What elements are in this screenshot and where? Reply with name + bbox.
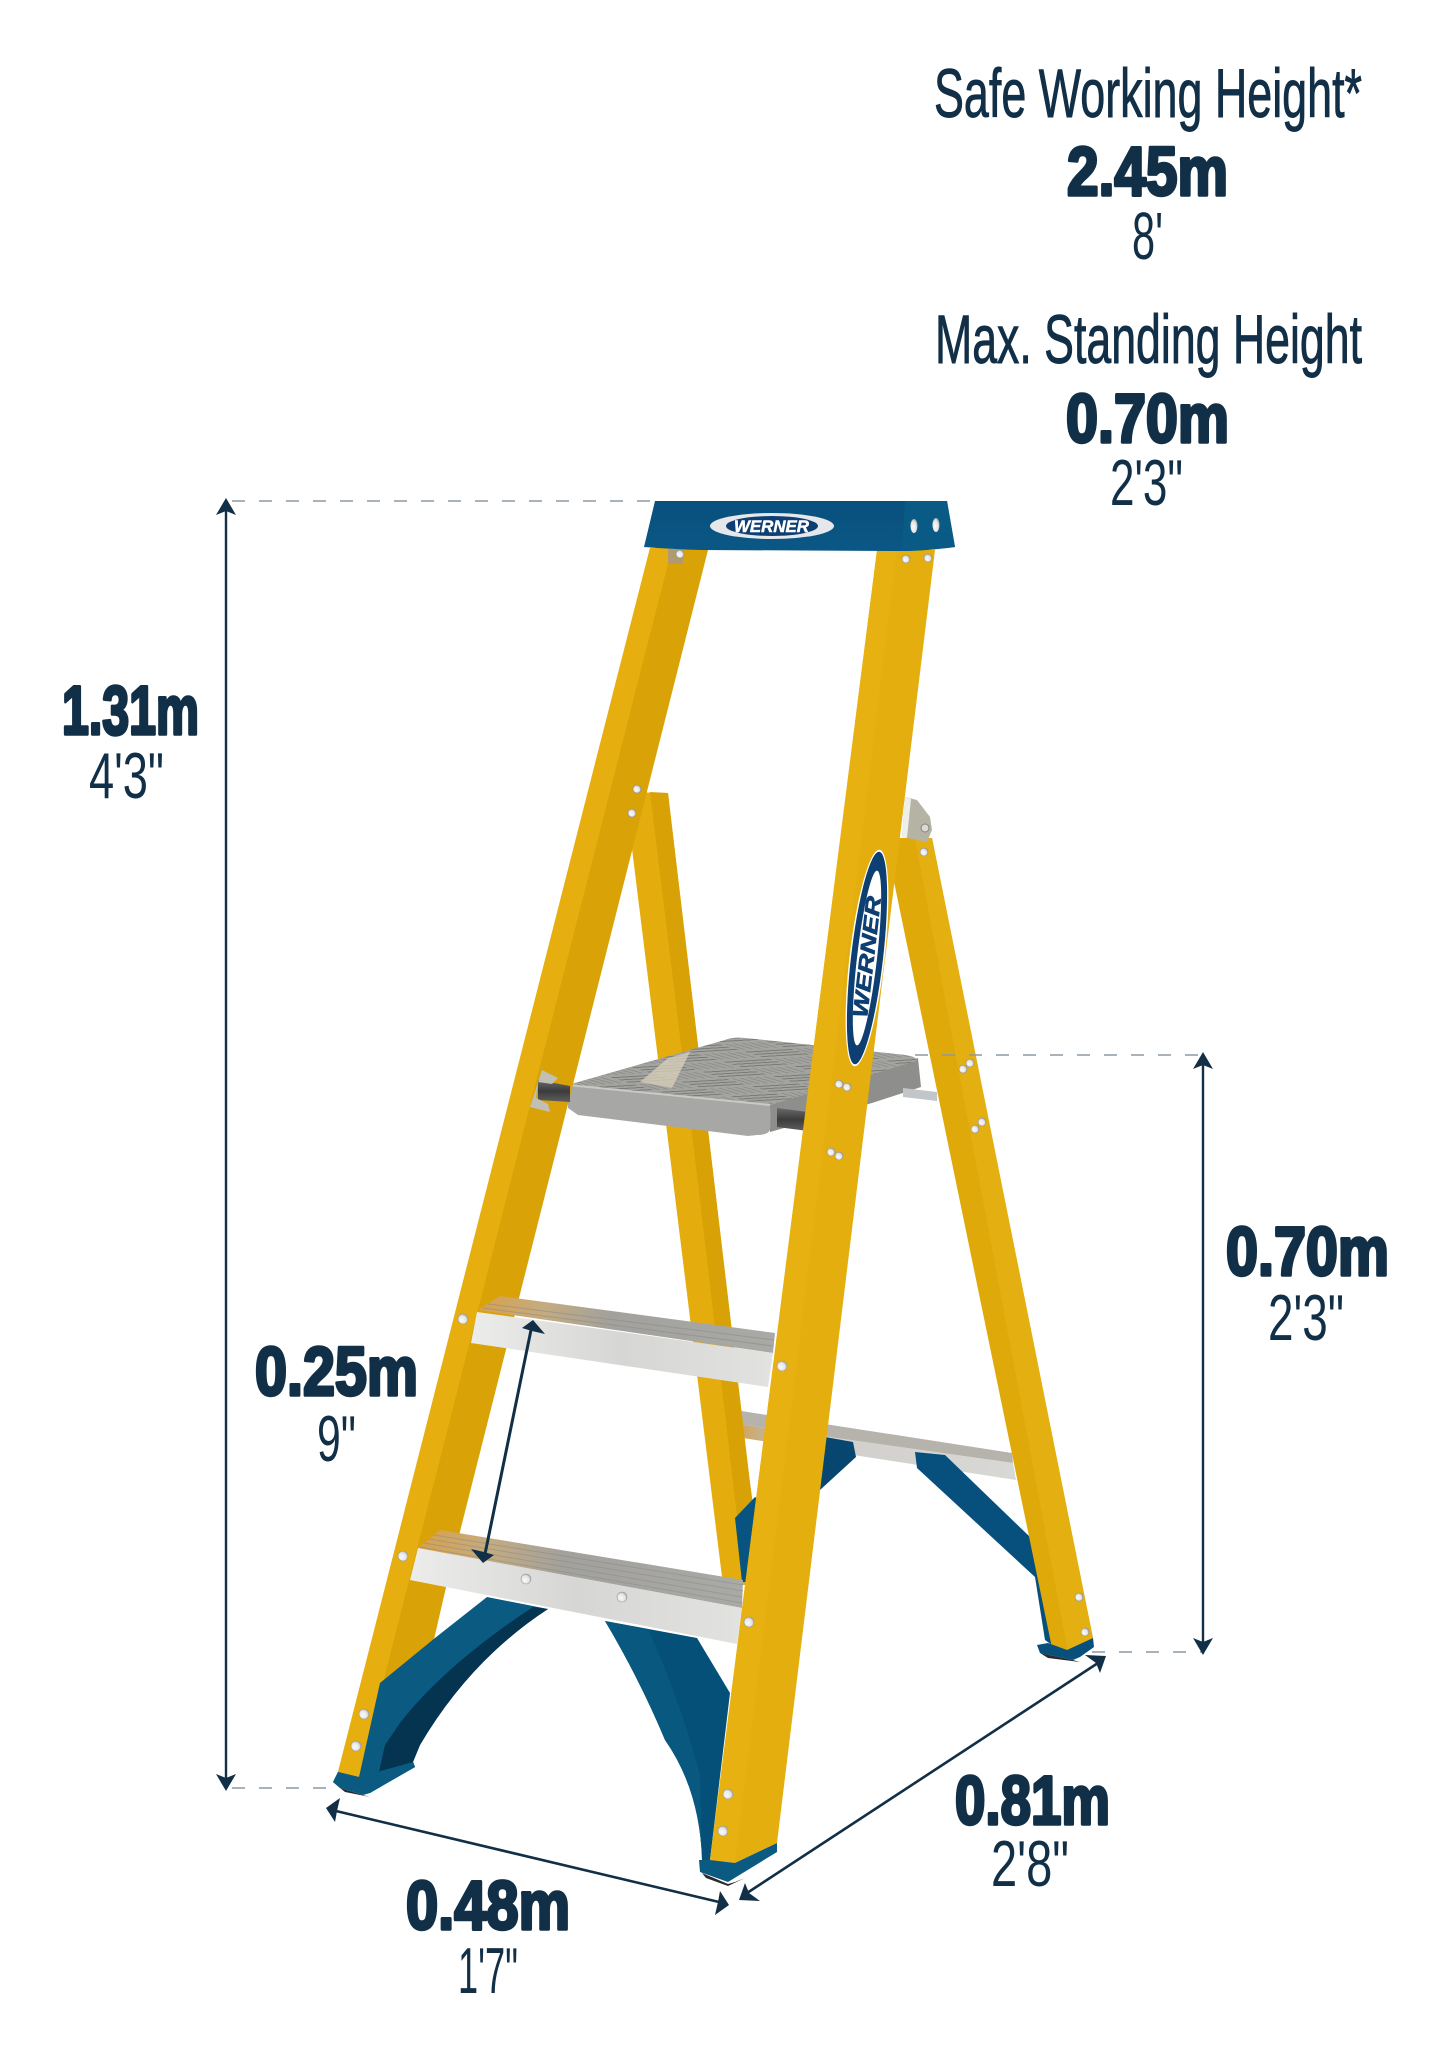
safe working height — [934, 55, 1362, 274]
ladder illustration — [333, 501, 1094, 1886]
top cap — [644, 501, 955, 551]
overall height label — [62, 672, 199, 812]
overall height label: 4'3" — [89, 739, 164, 812]
rung spacing label — [255, 1333, 418, 1475]
width label: 0.48m — [406, 1867, 570, 1944]
cap logo — [710, 513, 834, 539]
platform step — [568, 1038, 921, 1136]
rail rivets — [351, 550, 932, 1836]
right spreader foot brace — [605, 1621, 730, 1860]
rung spacing arrow 0.25m — [471, 1320, 545, 1563]
max standing height: 0.70m — [1066, 380, 1229, 457]
height arrow 0.70m — [1193, 1052, 1213, 1655]
platform left axle rod — [538, 1080, 570, 1102]
upper tread — [471, 1296, 775, 1387]
max standing height — [935, 301, 1362, 519]
depth label: 0.81m — [955, 1762, 1110, 1839]
rear right leg — [885, 838, 1093, 1652]
platform left bracket — [530, 1070, 558, 1112]
cap logo: WERNER — [734, 517, 810, 536]
side rail logo — [837, 848, 897, 1068]
side rail logo: WERNER — [849, 894, 886, 1019]
rail fixing tab — [668, 549, 683, 564]
standing height label: 0.70m — [1226, 1213, 1389, 1290]
hinge plate — [902, 797, 932, 842]
rung spacing label: 9" — [317, 1402, 356, 1475]
rear foot — [1037, 1638, 1094, 1662]
right foot — [699, 1843, 777, 1886]
depth arrow 0.81m — [739, 1655, 1106, 1901]
safe working height: 2.45m — [1067, 133, 1228, 210]
safe working height: 8' — [1132, 199, 1163, 274]
rear cross rung — [722, 1408, 1016, 1480]
max standing height: 2'3" — [1110, 446, 1183, 519]
lower tread — [410, 1530, 743, 1644]
width arrow 0.48m — [326, 1798, 729, 1915]
front right rail — [710, 550, 935, 1863]
overall height label: 1.31m — [62, 672, 199, 749]
depth label: 2'8" — [991, 1827, 1069, 1900]
dashed guide lines — [232, 501, 1204, 1788]
rear left brace — [790, 1437, 856, 1520]
left spreader foot brace — [333, 1597, 548, 1793]
left foot — [333, 1762, 415, 1797]
inner blue brace — [735, 1497, 775, 1582]
standing height label — [1226, 1213, 1389, 1354]
front left rail — [338, 548, 708, 1777]
rear left rail — [625, 792, 764, 1585]
rear leg rivets — [920, 848, 1089, 1636]
width label — [406, 1867, 570, 2007]
height arrow 1.31m — [216, 498, 236, 1791]
platform right axle rods — [777, 1088, 937, 1131]
depth label — [955, 1762, 1110, 1900]
width label: 1'7" — [458, 1934, 518, 2007]
standing height label: 2'3" — [1268, 1281, 1344, 1354]
rung spacing label: 0.25m — [255, 1333, 418, 1410]
rear right brace — [915, 1452, 1052, 1645]
